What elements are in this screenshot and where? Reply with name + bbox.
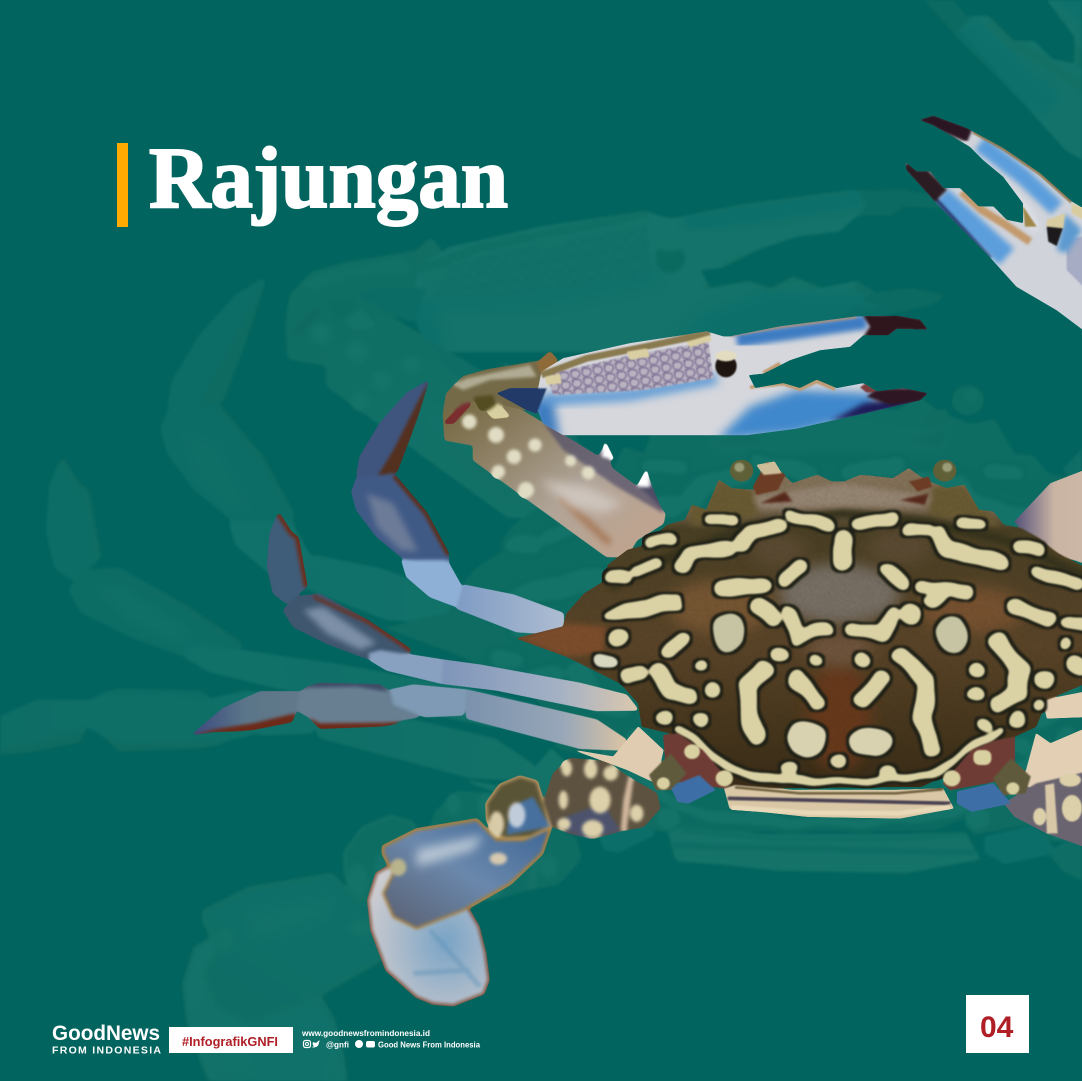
paddle upper blade: [383, 820, 550, 928]
crab illustration: [192, 115, 1082, 1005]
left claw carpus: [443, 352, 557, 423]
palm net pattern: [547, 342, 713, 395]
paddle lower blade: [368, 865, 488, 1005]
page number badge: 04: [980, 1011, 1014, 1044]
left claw arm: [443, 390, 665, 557]
shell shading: [516, 470, 1082, 790]
website and social handles: @gnfi: [326, 1040, 349, 1050]
website and social handles: [301, 1029, 481, 1050]
right side leg stubs: [1022, 690, 1082, 787]
upper finger: [737, 322, 867, 340]
website and social handles: www.goodnewsfromindonesia.id: [301, 1029, 430, 1038]
right corner orbit: [943, 737, 1015, 790]
pincer blue shading: [717, 390, 877, 440]
claw hinge: [715, 355, 737, 377]
front plate: [724, 785, 954, 818]
walking leg 2: [267, 513, 638, 711]
title: [117, 129, 508, 227]
left side leg stubs: [574, 727, 663, 783]
top right claw: [906, 115, 1082, 340]
title accent bar: [117, 143, 128, 227]
eye left: [730, 460, 785, 495]
brand logo: GoodNews: [52, 1021, 160, 1045]
walking leg 1: [352, 381, 563, 633]
page number badge: [966, 995, 1029, 1053]
right claw arm stub: [1015, 467, 1082, 567]
hashtag badge: [169, 1027, 293, 1053]
swimming paddle leg: [368, 758, 660, 1005]
left claw pincer: [497, 313, 930, 440]
carapace group: [516, 460, 1082, 850]
shell base: [516, 468, 1082, 788]
footer: [52, 995, 1029, 1056]
walking leg 3: [192, 683, 627, 750]
shell markings: [600, 517, 1082, 781]
leg joint segment small: [487, 777, 550, 838]
hashtag badge: #InfografikGNFI: [182, 1034, 278, 1049]
eye right: [909, 460, 956, 492]
title text: Rajungan: [149, 129, 508, 226]
brand logo: FROM INDONESIA: [52, 1044, 161, 1056]
brand logo: [52, 1021, 161, 1056]
left corner orbit: [663, 733, 731, 788]
leg joint segment large: [543, 758, 660, 838]
website and social handles: Good News From Indonesia: [378, 1040, 481, 1050]
